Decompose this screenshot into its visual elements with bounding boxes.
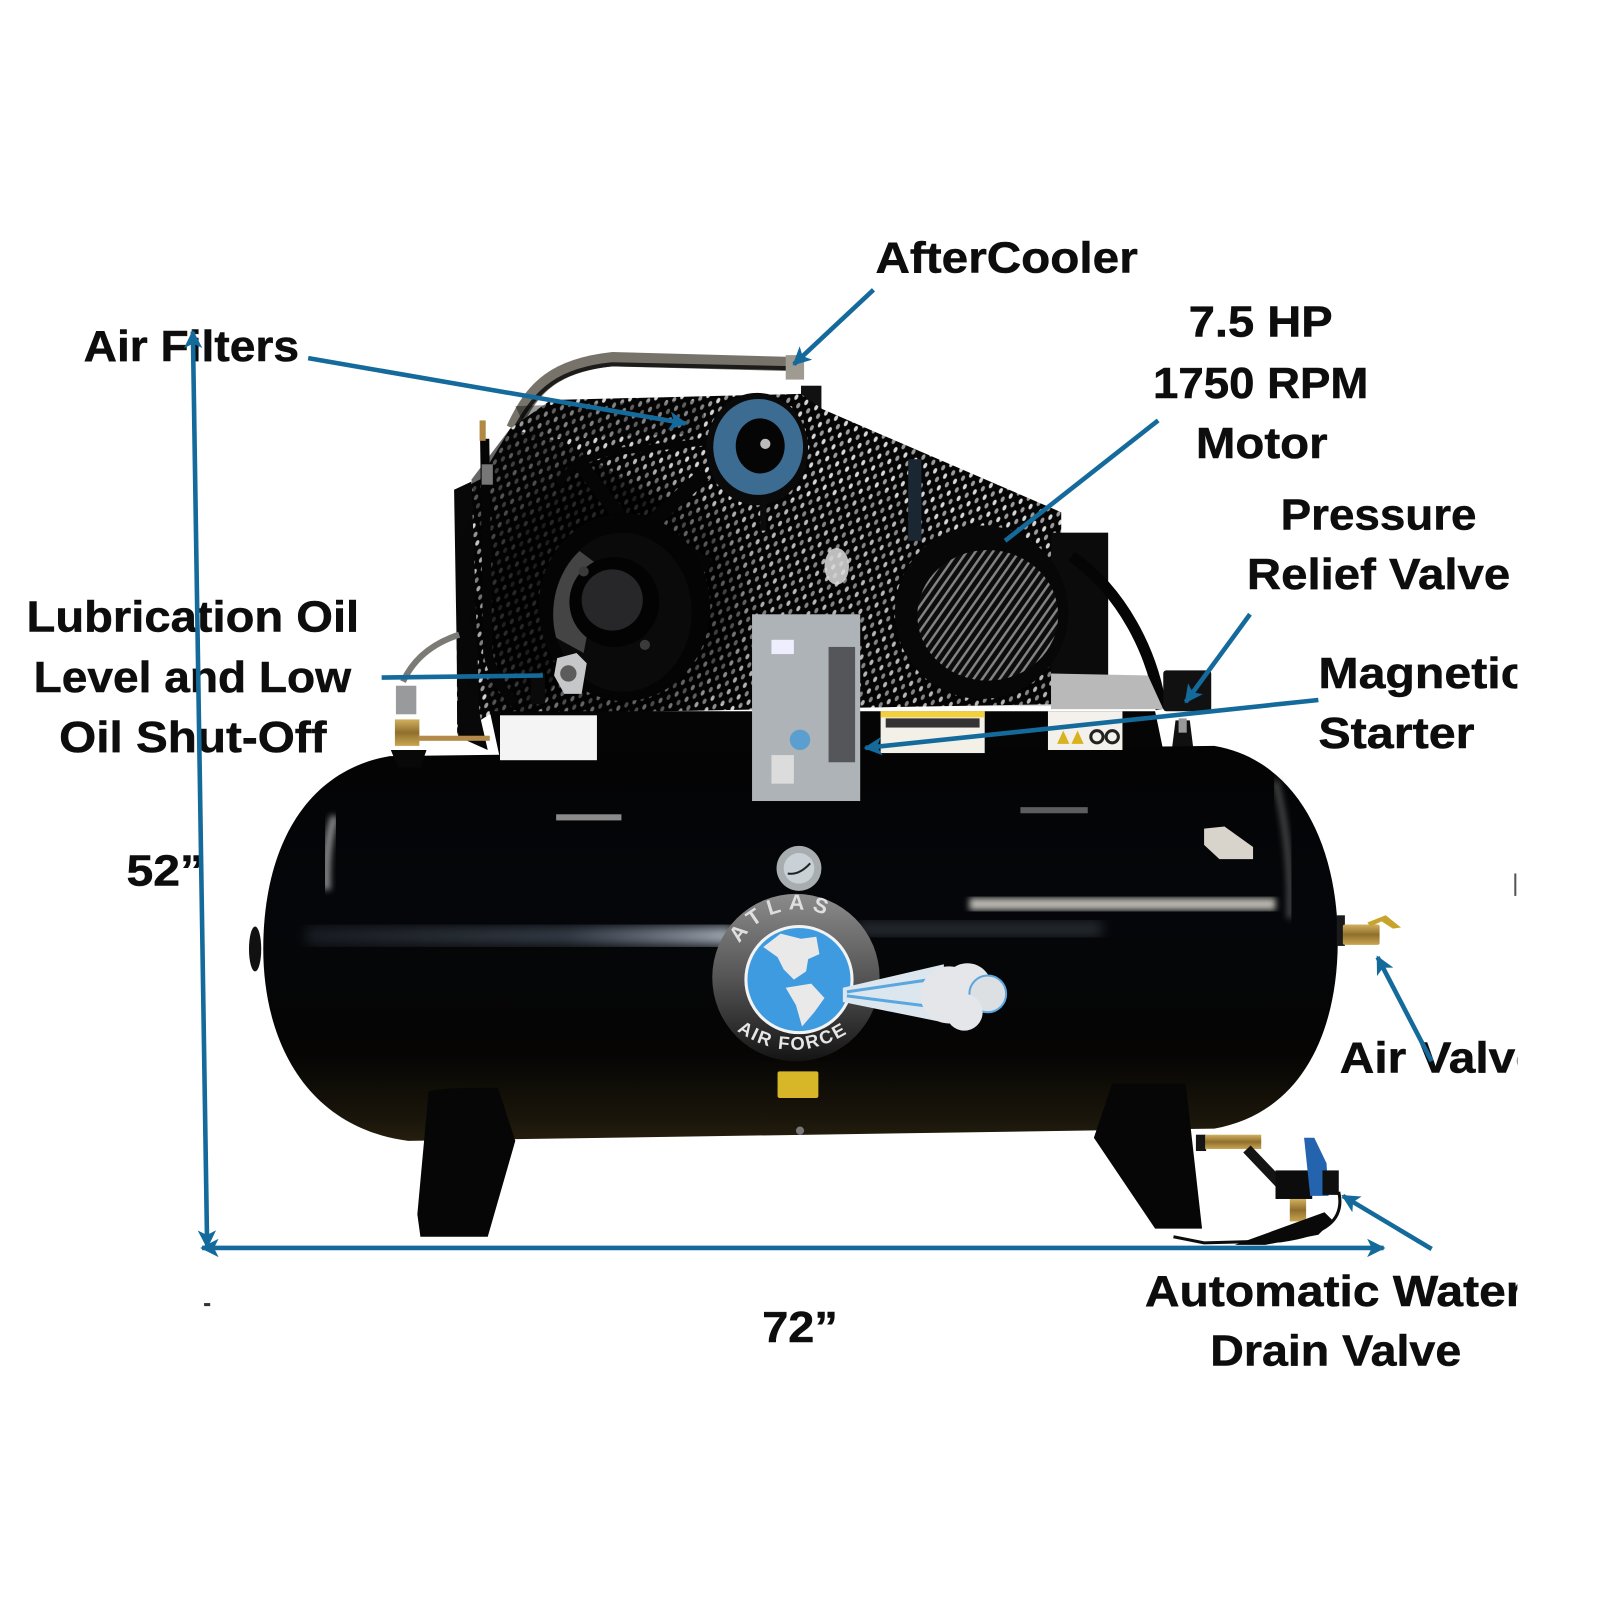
air filter	[706, 393, 808, 531]
arrow: drain valve	[1343, 1196, 1432, 1249]
globe	[746, 927, 852, 1033]
arrow: lubrication oil	[382, 676, 543, 678]
label: motor spec: Motor	[1196, 419, 1328, 468]
bottom fitting	[796, 1127, 804, 1135]
atlas air force logo	[712, 894, 1008, 1061]
logo ring text top: ATLAS	[731, 894, 828, 943]
label: motor spec: 7.5 HP	[1189, 298, 1333, 347]
continents	[763, 934, 824, 1027]
label: Automatic Water Drain Valve: Drain Valve	[1210, 1326, 1461, 1375]
label: Pressure Relief Valve: Relief Valve	[1247, 550, 1510, 599]
label: motor spec	[1153, 298, 1368, 468]
stray mark right	[1514, 873, 1516, 896]
yellow data tag	[778, 1071, 818, 1098]
arrow: air valve	[1378, 957, 1432, 1061]
air valve	[1337, 915, 1401, 946]
label: Magnetic Starter: Starter	[1318, 709, 1474, 758]
safety label center	[881, 711, 985, 753]
label: motor spec: 1750 RPM	[1153, 359, 1368, 408]
pressure gauge	[777, 846, 821, 891]
warning label right	[1048, 711, 1122, 750]
arrow: magnetic starter	[865, 700, 1318, 748]
label: Lubrication Oil Level and Low Oil Shut-Off: Level and Low	[34, 653, 352, 702]
arrow: width dimension	[202, 1246, 1384, 1250]
label: Magnetic Starter	[1320, 656, 1518, 749]
label: width dimension: 72”	[762, 1303, 838, 1352]
automatic drain valve	[1173, 1135, 1340, 1245]
label: Automatic Water Drain Valve	[1146, 1274, 1518, 1366]
compressor illustration	[249, 352, 1401, 1245]
arrow: height dimension	[193, 332, 207, 1247]
stray mark bottom left	[204, 1303, 210, 1306]
air plume	[843, 963, 1006, 1031]
arrow: Air Filters	[308, 358, 686, 423]
oil level sight glass	[531, 653, 587, 704]
mounting base	[490, 711, 1173, 806]
label: Magnetic Starter: Magnetic	[1318, 649, 1528, 698]
label: Air Filters: Air Filters	[84, 322, 299, 371]
label: Air Valve: Air Valve	[1340, 1033, 1542, 1082]
flywheel	[539, 513, 710, 701]
label: AfterCooler: AfterCooler	[876, 233, 1138, 282]
pressure relief valve	[1163, 670, 1211, 753]
aftercooler tube	[513, 355, 821, 429]
air tank	[263, 746, 1338, 1141]
right foot	[1094, 1084, 1202, 1229]
tank end nub	[249, 927, 261, 971]
label: height dimension: 52”	[127, 847, 204, 896]
arrow: AfterCooler	[794, 290, 873, 364]
label: Pressure Relief Valve: Pressure	[1281, 491, 1477, 540]
label: Lubrication Oil Level and Low Oil Shut-Off: Lubrication Oil	[27, 593, 359, 642]
tank highlights	[306, 781, 1290, 945]
left hose and fitting	[391, 635, 490, 767]
left foot	[417, 1088, 515, 1237]
pump frame with mesh guard	[454, 394, 1061, 750]
arrow: motor	[1005, 420, 1158, 541]
label: Lubrication Oil Level and Low Oil Shut-Off	[27, 593, 359, 762]
safety label left	[500, 715, 597, 760]
arrow: pressure relief valve	[1186, 614, 1250, 702]
label: Automatic Water Drain Valve: Automatic Water	[1145, 1267, 1524, 1316]
label: Lubrication Oil Level and Low Oil Shut-Off: Oil Shut-Off	[59, 713, 327, 762]
magnetic starter box	[752, 614, 860, 801]
logo ring text bottom: AIR FORCE	[737, 1022, 846, 1050]
electric motor	[895, 526, 1163, 709]
label: Pressure Relief Valve	[1247, 491, 1510, 599]
